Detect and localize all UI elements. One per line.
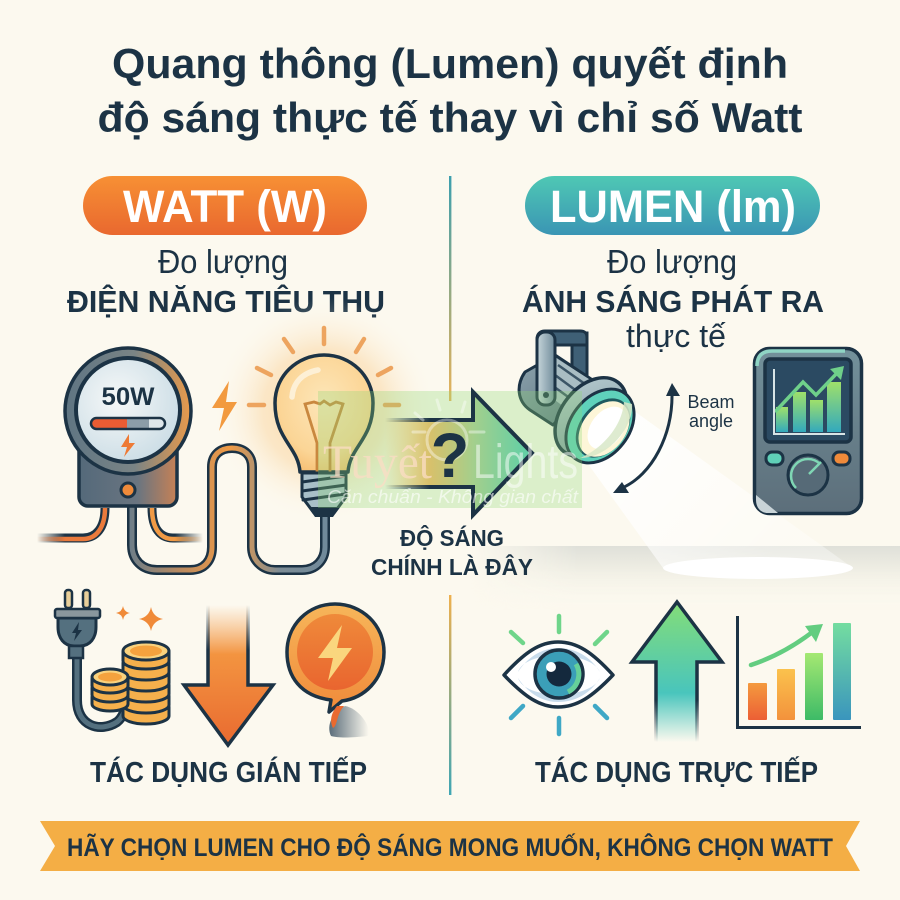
text: đo lượng: Đo lượng <box>158 243 288 280</box>
watermark name right: Lights <box>473 436 578 489</box>
left coin stack <box>92 669 128 711</box>
arrow: up <box>632 602 722 742</box>
icon: wires <box>37 448 325 570</box>
arrow: big question arrow <box>385 392 532 515</box>
title <box>98 40 803 141</box>
watermark panel <box>318 391 582 508</box>
panel: watt header <box>67 176 385 319</box>
pill: LUMEN: LUMEN (lm) <box>550 181 796 232</box>
watermark name: Tuyết <box>323 436 433 489</box>
text: beam angle: Beam <box>687 392 735 412</box>
text: điện năng tiêu thụ: ĐIỆN NĂNG TIÊU THỤ <box>67 283 385 319</box>
text: độ sáng chính là đây: ĐỘ SÁNG <box>400 524 504 551</box>
text: 50W: 50W <box>102 383 155 411</box>
icon: lightning bolt <box>212 381 237 431</box>
icon: sparkles <box>116 606 163 631</box>
icon: plug with cable <box>55 590 126 727</box>
arrow: down <box>183 605 274 746</box>
icon: eye <box>504 616 613 734</box>
floor shadow <box>502 546 900 579</box>
icon: bulb rays <box>249 328 399 405</box>
icon: spotlight <box>519 331 648 476</box>
pill: WATT <box>83 176 367 235</box>
right coin stack <box>123 642 169 724</box>
question mark: ? <box>431 421 469 491</box>
text: tác dụng trực tiếp: TÁC DỤNG TRỰC TIẾP <box>535 755 818 789</box>
icon: beam angle arrow <box>613 383 680 493</box>
pill: WATT: WATT (W) <box>123 181 327 232</box>
bulb glow <box>212 298 436 522</box>
device screen <box>765 359 851 442</box>
text: beam angle: angle <box>689 411 733 431</box>
watermark bulb <box>413 400 484 460</box>
title: độ sáng thực tế thay vì chỉ số Watt <box>98 94 803 141</box>
text: thực tế: thực tế <box>626 318 726 354</box>
watermark slogan: Căn chuẩn - Không gian chất <box>327 487 579 507</box>
title: Quang thông (Lumen) quyết định <box>112 40 788 87</box>
banner text: HÃY CHỌN LUMEN CHO ĐỘ SÁNG MONG MUỐN, KHÔNG CHỌN WATT <box>67 832 833 862</box>
icon: light bulb <box>275 355 373 517</box>
divider bottom <box>449 595 451 795</box>
icon: electricity meter <box>65 348 191 506</box>
icon: coin stacks <box>92 642 169 724</box>
banner <box>40 821 860 871</box>
text: beam angle <box>687 392 735 431</box>
text: độ sáng chính là đây <box>371 524 533 580</box>
panel: lumen header <box>522 176 824 354</box>
text: đo lượng: Đo lượng <box>607 243 737 280</box>
icon: balloon bolt <box>287 604 384 738</box>
divider top <box>449 176 451 401</box>
bar chart <box>738 616 861 728</box>
watermark text <box>323 400 579 507</box>
icon: light meter device <box>754 348 862 514</box>
text: ánh sáng phát ra: ÁNH SÁNG PHÁT RA <box>522 284 824 319</box>
text: độ sáng chính là đây: CHÍNH LÀ ĐÂY <box>371 553 533 580</box>
floor light spot <box>663 557 853 579</box>
text: tác dụng gián tiếp: TÁC DỤNG GIÁN TIẾP <box>90 755 367 789</box>
light beam <box>583 408 853 579</box>
